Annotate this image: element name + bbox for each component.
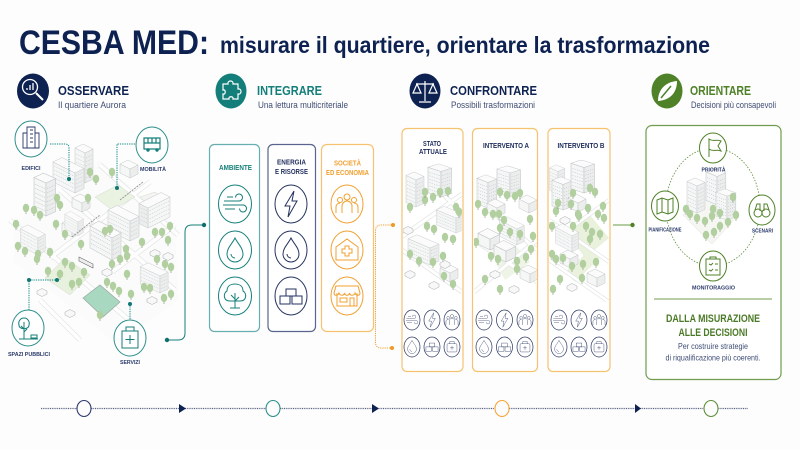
panel: intervento a: [472, 128, 538, 372]
mini map: [549, 160, 609, 302]
indicator icons: [476, 310, 533, 357]
callout: servizi: SERVIZI: [120, 360, 140, 366]
arrow: criteria to scenarios: [376, 223, 395, 350]
icon: energy: [275, 185, 307, 223]
central neighbourhood: [683, 168, 739, 244]
icon: compass leaf: [652, 74, 682, 108]
icon: magnifier: [17, 74, 49, 108]
panel: stato attuale: STATO: [423, 141, 441, 148]
conclusion text: Per costruire strategie: [678, 341, 748, 351]
icon: materials: [275, 277, 307, 315]
node: priorita: PRIORITÀ: [702, 166, 726, 174]
icon: puzzle: [216, 74, 246, 108]
panel: stato attuale: [400, 128, 470, 372]
node: monitoraggio: [692, 251, 736, 292]
node: monitoraggio: MONITORAGGIO: [692, 286, 736, 292]
indicator icons: [551, 310, 607, 357]
panel: energia e risorse: ENERGIA: [277, 160, 306, 166]
arrow: timeline 2: [372, 404, 379, 413]
node: scenari: SCENARI: [752, 228, 773, 234]
callout: mobilita: MOBILITÀ: [140, 166, 166, 173]
step header: osservare: OSSERVARE: [58, 83, 129, 98]
panel: intervento a: INTERVENTO A: [483, 143, 529, 150]
callout: spazi pubblici: [8, 278, 59, 358]
conclusion text: [666, 313, 760, 362]
indicator icons: [404, 310, 460, 357]
icon: tree: [218, 277, 252, 315]
panel: intervento b: [548, 128, 610, 372]
icon: people: [331, 185, 363, 223]
node: pianificazione: PIANIFICAZIONE: [648, 228, 682, 234]
panel: societa ed economia: SOCIETÀ: [334, 158, 361, 168]
arrow: map to criteria: [165, 223, 206, 342]
title: [19, 24, 710, 62]
timeline stop: integrare: [266, 400, 280, 416]
arrow: scenarios to decisions: [613, 223, 635, 227]
step header: confrontare: CONFRONTARE: [450, 83, 537, 98]
panel: energia e risorse: E RISORSE: [275, 169, 308, 176]
node: priorita: [700, 133, 726, 174]
step header: osservare: [17, 74, 129, 110]
title: misurare il quartiere, orientare la trasformazione: [220, 32, 710, 58]
callout: edifici: [15, 121, 71, 181]
panel: ambiente: AMBIENTE: [219, 165, 252, 172]
icon: water: [275, 231, 307, 269]
mini map: [403, 164, 462, 294]
isometric neighbourhood map: [8, 121, 178, 366]
conclusion text: ALLE DECISIONI: [678, 327, 748, 339]
icon: wind: [218, 185, 252, 223]
step header: integrare: [216, 74, 348, 110]
arrow: timeline 3: [635, 404, 641, 413]
mini map: [473, 166, 538, 295]
trees: [13, 168, 174, 321]
panel: orientare decisions: [646, 126, 781, 380]
decision cycle: [648, 133, 775, 292]
timeline: [41, 400, 748, 416]
step header: integrare: INTEGRARE: [257, 83, 322, 98]
panel: ambiente: [210, 144, 260, 332]
step header: orientare: Decisioni più consapevoli: [691, 100, 776, 110]
panel: stato attuale: ATTUALE: [419, 149, 447, 156]
panel: societa ed economia: ED ECONOMIA: [326, 170, 369, 177]
step header: orientare: [652, 74, 776, 110]
timeline stop: orientare: [704, 400, 718, 416]
callout: mobilita: [115, 127, 168, 190]
arrow: timeline 1: [179, 404, 186, 413]
panel: energia e risorse: [268, 144, 316, 332]
callout: servizi: [114, 302, 146, 366]
icon: shop: [331, 277, 363, 315]
node: scenari: [749, 195, 775, 234]
step header: integrare: Una lettura multicriteriale: [258, 100, 348, 110]
title: CESBA MED:: [19, 24, 209, 62]
panel: societa ed economia: [322, 144, 374, 332]
icon: water: [218, 231, 252, 269]
conclusion text: DALLA MISURAZIONE: [666, 313, 760, 325]
step header: osservare: Il quartiere Aurora: [58, 100, 126, 110]
callout: edifici: EDIFICI: [22, 166, 41, 172]
conclusion text: di riqualificazione più coerenti.: [666, 352, 760, 362]
callout: spazi pubblici: SPAZI PUBBLICI: [8, 352, 50, 358]
timeline stop: confrontare: [495, 400, 509, 416]
panel: intervento b: INTERVENTO B: [558, 143, 604, 150]
icon: health: [331, 231, 363, 269]
timeline stop: osservare: [77, 400, 91, 416]
buildings: [20, 144, 173, 318]
node: pianificazione: [648, 191, 682, 234]
step header: confrontare: Possibili trasformazioni: [451, 100, 535, 110]
icon: scales: [410, 74, 440, 108]
ground and roads: [10, 160, 178, 345]
step header: orientare: ORIENTARE: [690, 83, 751, 98]
step header: confrontare: [410, 74, 537, 110]
football field: [83, 285, 120, 317]
